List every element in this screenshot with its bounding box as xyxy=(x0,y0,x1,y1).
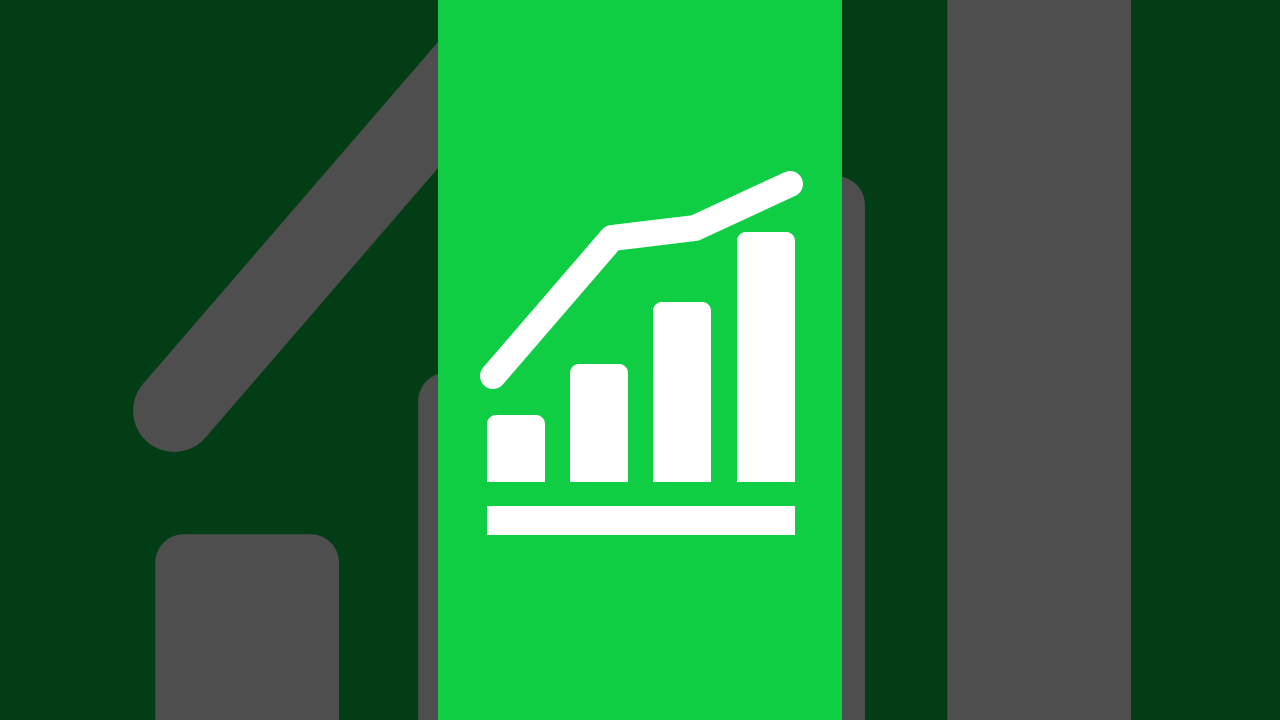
icon: white chart xyxy=(487,184,795,535)
background: enlarged grey icon xyxy=(133,0,1131,720)
panel: green center xyxy=(438,0,842,720)
